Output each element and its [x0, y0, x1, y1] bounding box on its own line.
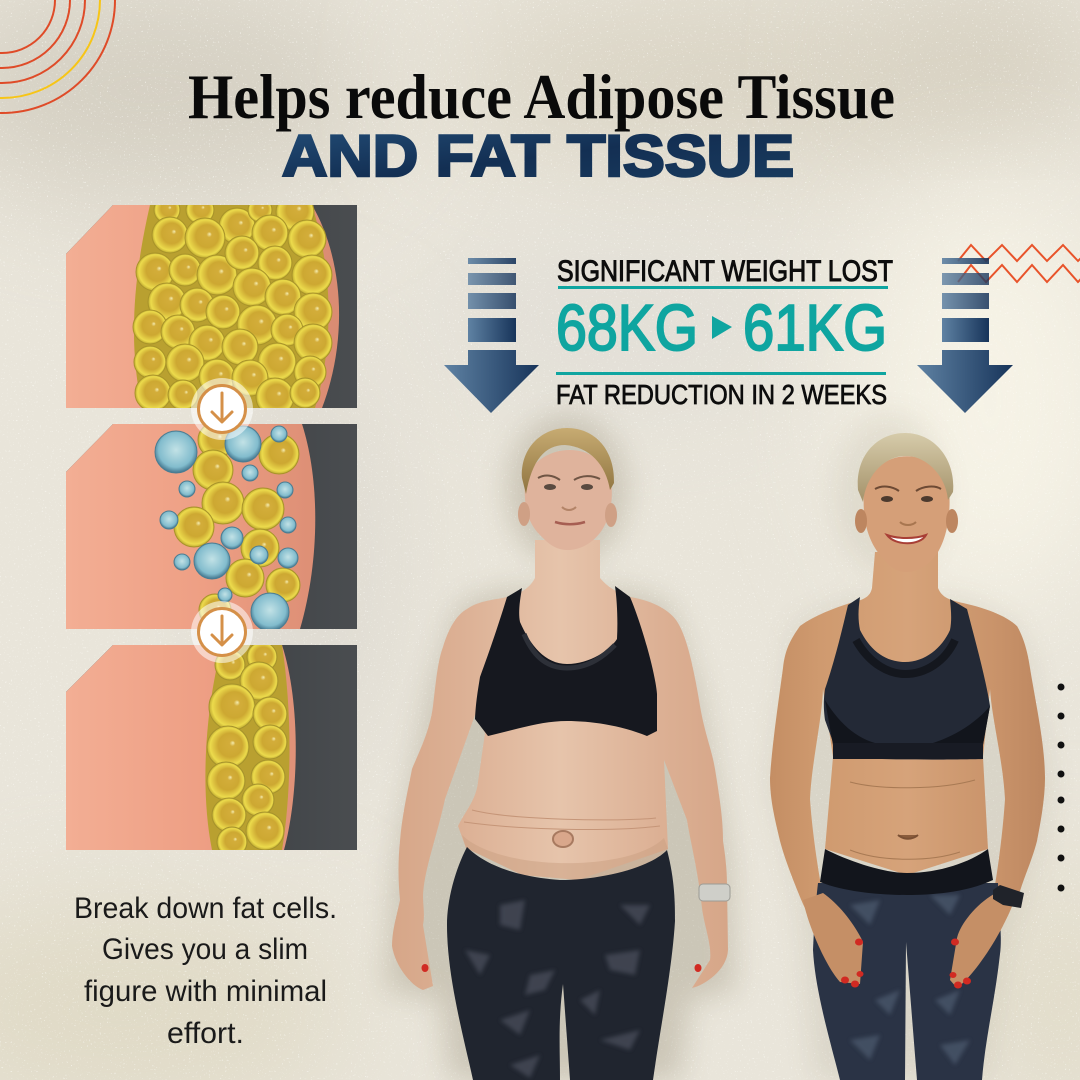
text block: description [74, 892, 337, 1050]
panel: fat cells breaking down [66, 422, 357, 631]
arrow: right down arrow [917, 258, 1013, 413]
head [518, 428, 617, 550]
hands [803, 893, 1017, 988]
decorative concentric arcs [0, 0, 115, 113]
text block: description: Break down fat cells. [74, 892, 337, 925]
figure shadows [385, 415, 1050, 1080]
head [855, 433, 958, 572]
text block: description: figure with minimal [84, 975, 327, 1008]
bra [824, 597, 990, 760]
body [770, 552, 1045, 988]
stat heading: SIGNIFICANT WEIGHT LOST [557, 255, 893, 288]
heading line 1: Helps reduce Adipose Tissue [188, 61, 895, 132]
navel [553, 831, 573, 847]
arrow: left down arrow [444, 258, 539, 413]
leggings [447, 847, 675, 1080]
text block: description: Gives you a slim [102, 933, 308, 966]
body [392, 540, 728, 990]
weight loss stat block [556, 255, 893, 410]
belly shading [462, 835, 668, 880]
icon: down arrow circle 1 [191, 378, 253, 440]
camouflage pattern [465, 900, 650, 1078]
nails [841, 938, 971, 988]
waistband [820, 849, 993, 895]
photo: after woman [770, 433, 1045, 1080]
decorative dots [1058, 684, 1064, 892]
watch [699, 884, 730, 901]
heading line 2: AND FAT TISSUE [282, 124, 794, 189]
bra [475, 586, 657, 736]
title [188, 61, 895, 189]
starting weight: 68KG [556, 291, 698, 364]
zigzag decoration [958, 245, 1080, 282]
nails [422, 964, 702, 972]
stat caption: FAT REDUCTION IN 2 WEEKS [556, 379, 887, 410]
navel [898, 835, 918, 839]
leggings [813, 883, 1001, 1080]
icon: right triangle [712, 316, 732, 339]
panel: fat cells before [66, 193, 357, 417]
watch [993, 885, 1024, 908]
camouflage pattern [850, 895, 970, 1065]
icon: down arrow circle 2 [191, 601, 253, 663]
panel: fat cells reduced [66, 642, 357, 857]
photo: before woman [392, 428, 730, 1080]
text block: description: effort. [167, 1017, 244, 1050]
ending weight: 61KG [743, 291, 887, 364]
